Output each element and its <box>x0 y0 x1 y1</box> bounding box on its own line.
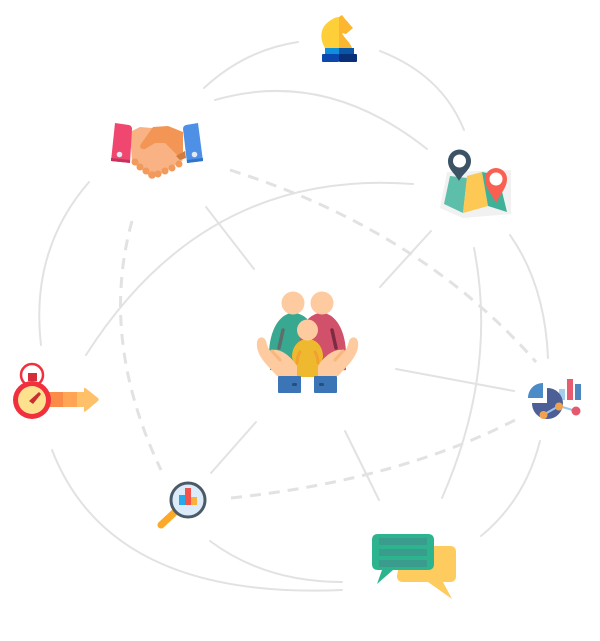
icon: handshake <box>111 123 203 179</box>
icon: speech bubbles <box>372 534 456 599</box>
parents <box>269 292 346 375</box>
icon: map with pins <box>440 150 511 218</box>
hands <box>257 337 297 376</box>
icon: family in caring hands <box>257 292 358 393</box>
child <box>292 320 323 377</box>
icon: pie chart with bars <box>528 379 581 419</box>
icon: chess knight <box>321 15 357 62</box>
cuffs <box>278 376 301 393</box>
icon: magnifying glass with chart <box>161 483 205 525</box>
icon: stopwatch with arrow <box>13 364 99 419</box>
